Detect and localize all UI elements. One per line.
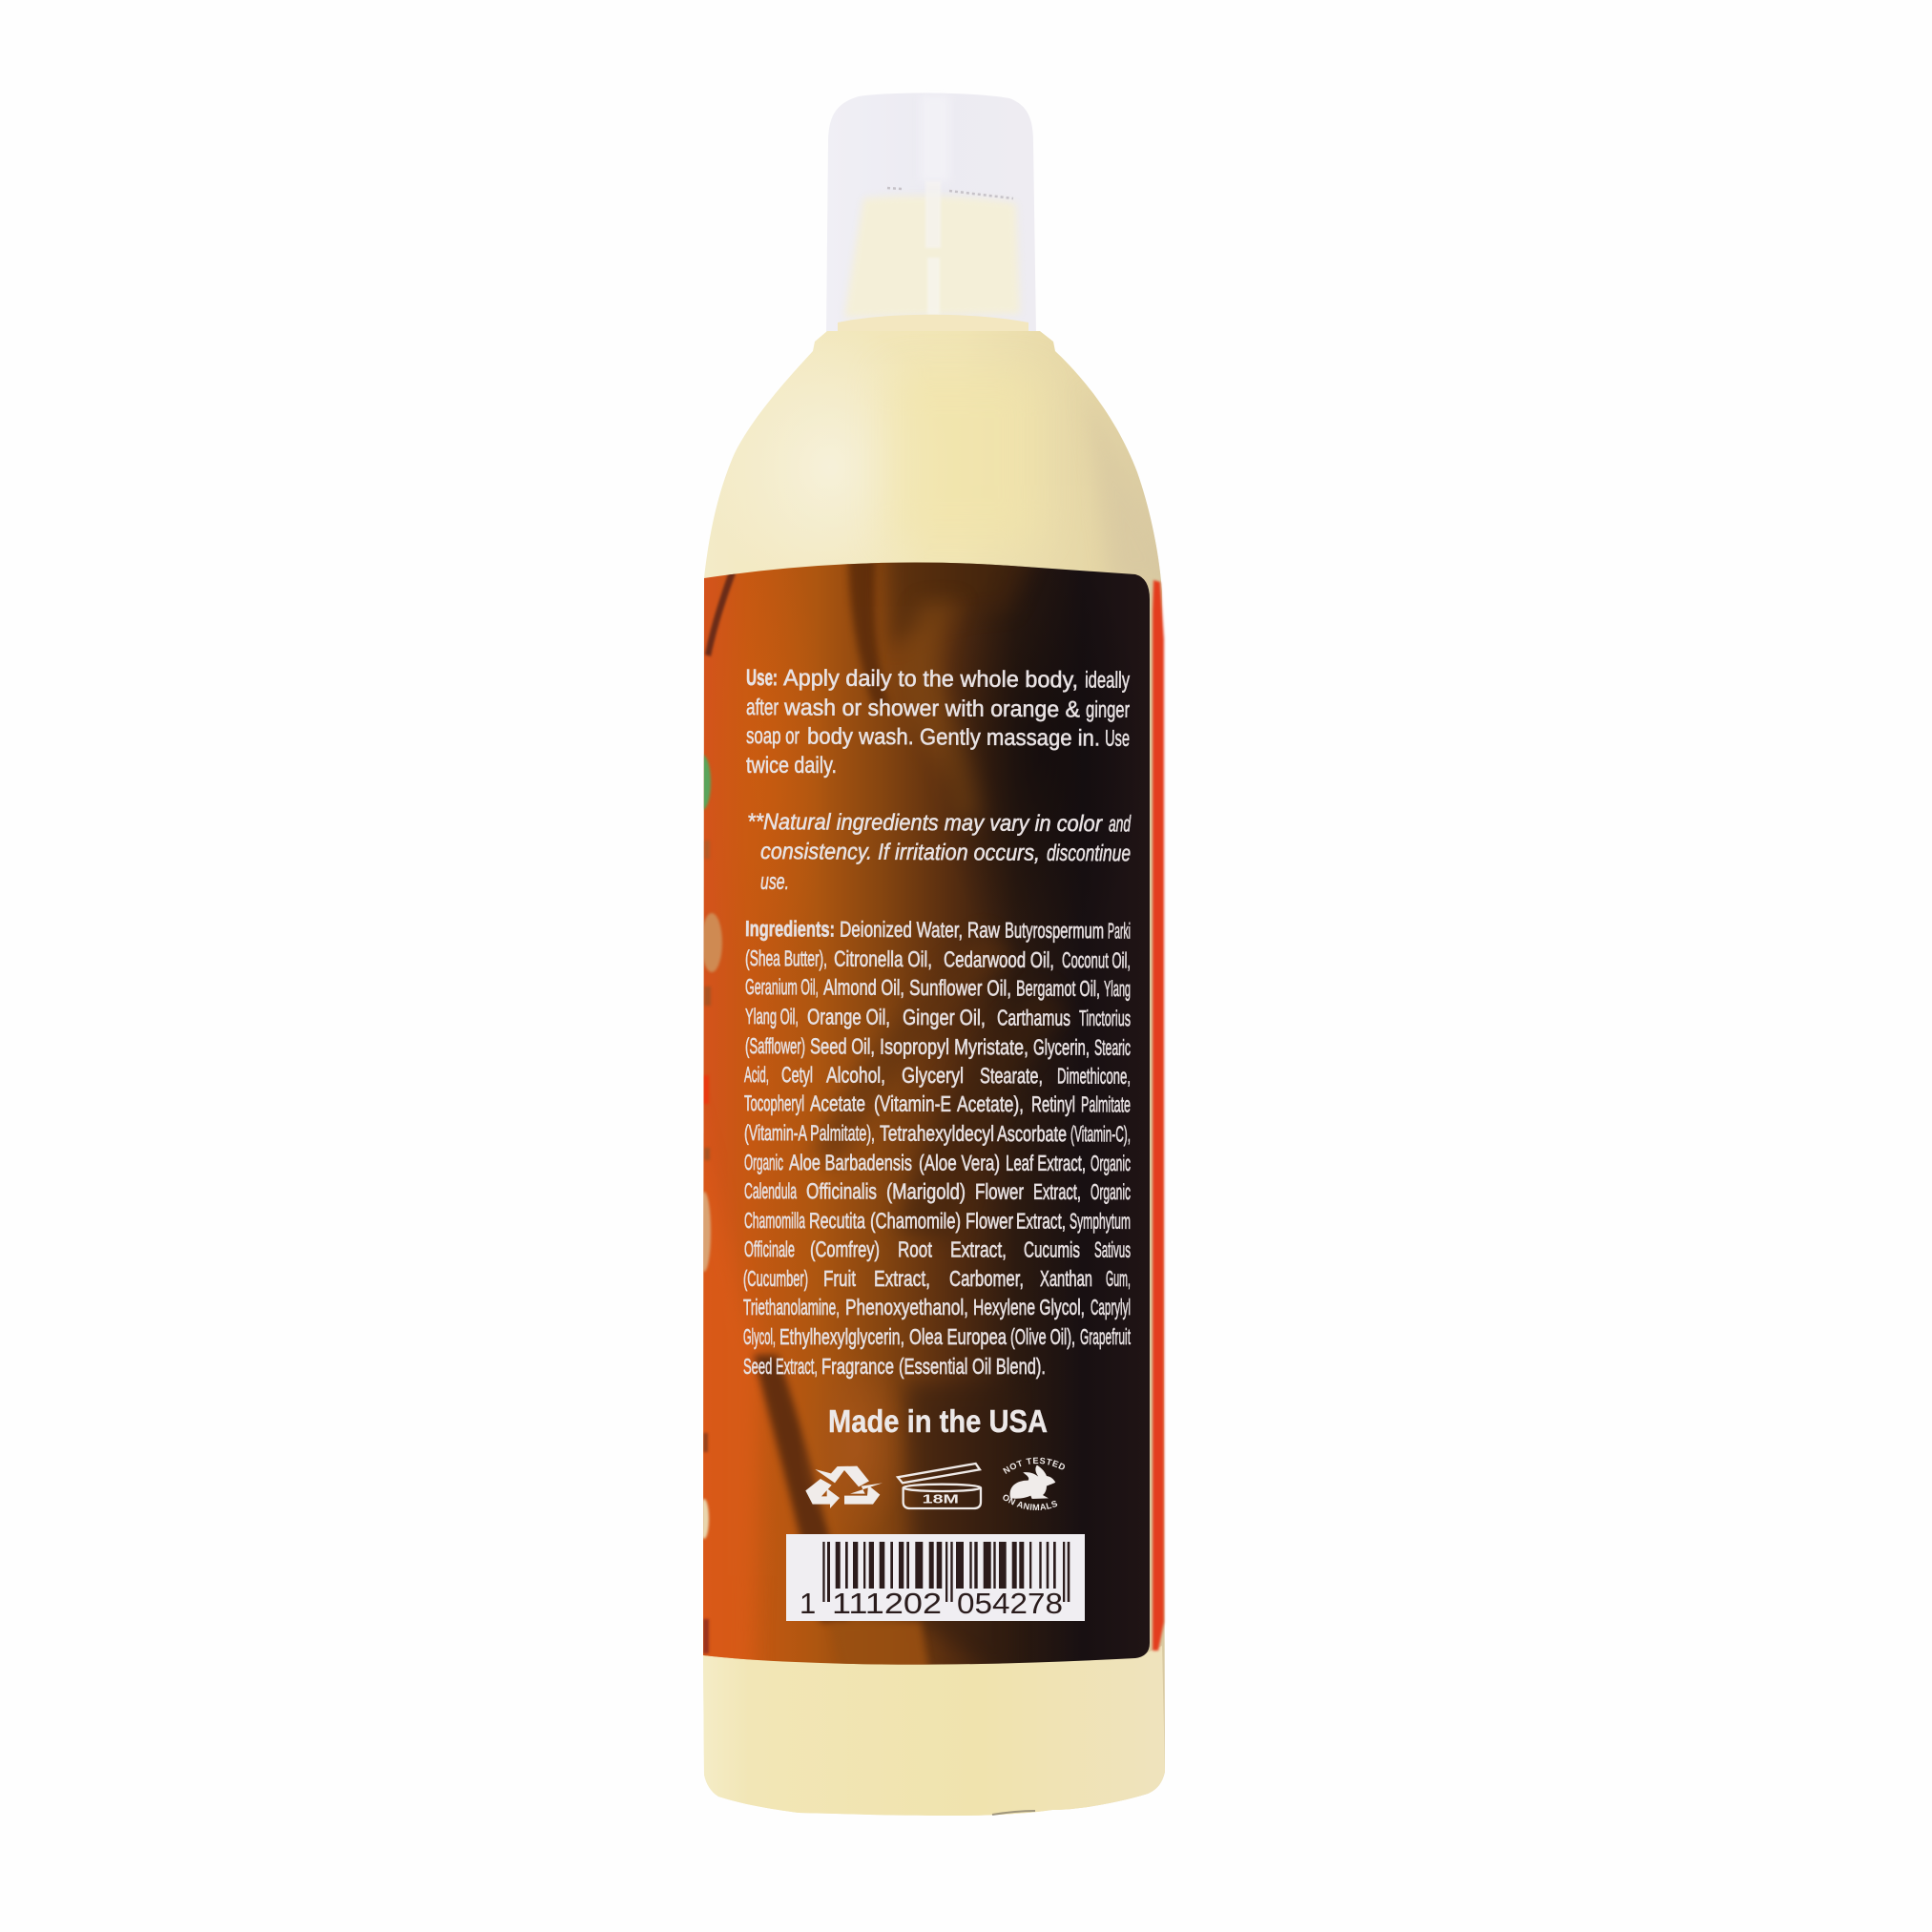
ingredients list: Tocopheryl <box>744 1091 804 1115</box>
ingredients list: Geranium Oil, <box>745 974 819 999</box>
ingredients list: Retinyl <box>1031 1091 1075 1116</box>
ingredients list: Triethanolamine, <box>743 1295 840 1319</box>
back label panel <box>687 534 1164 1679</box>
barcode digits: 1 <box>800 1587 816 1620</box>
ingredients list: Bergamot Oil, <box>1016 975 1100 1001</box>
ingredients list: Dimethicone, <box>1057 1063 1131 1089</box>
ingredients list: Acetate <box>810 1091 865 1115</box>
made in the USA: Made in the USA <box>828 1403 1048 1439</box>
ingredients list: Officinalis <box>806 1178 877 1203</box>
ingredients list: Alcohol, <box>826 1062 885 1088</box>
usage directions: soap or <box>746 723 800 749</box>
base shadow nick <box>992 1811 1035 1815</box>
icon: not tested on animals rabbit <box>1003 1458 1065 1510</box>
ingredients list: Root <box>898 1236 932 1261</box>
ingredients list: Almond Oil, <box>823 974 904 1000</box>
ingredients list: (Essential Oil Blend). <box>899 1354 1046 1379</box>
ingredients list: Seed Extract, <box>743 1354 818 1379</box>
ingredients list: (Vitamin-C), <box>1070 1121 1131 1146</box>
barcode digits <box>800 1587 1063 1620</box>
barcode bars <box>822 1542 1070 1602</box>
red front-label edge <box>1153 580 1164 1651</box>
ingredients list: Recutita <box>809 1208 865 1233</box>
ingredients list: Ascorbate <box>997 1121 1067 1146</box>
ingredients list: Calendula <box>744 1178 797 1203</box>
ingredients list: Acid, <box>744 1062 769 1087</box>
ingredients list: (Shea Butter), <box>745 945 827 971</box>
ingredients list: Stearate, <box>980 1063 1043 1088</box>
ingredients list: Extract, <box>1016 1208 1066 1234</box>
barcode digits: 111202 <box>832 1587 942 1620</box>
ingredients list: Ethylhexylglycerin, <box>779 1324 904 1349</box>
ingredients list: Officinale <box>744 1236 795 1261</box>
usage directions: ideally <box>1085 667 1130 694</box>
ingredients list: Citronella Oil, <box>834 946 932 971</box>
ingredients list: Orange Oil, <box>807 1004 890 1029</box>
usage directions: body wash. Gently massage in. <box>807 723 1100 752</box>
ingredients list: Ginger Oil, <box>903 1005 986 1029</box>
ingredients list: Caprylyl <box>1091 1295 1131 1319</box>
ingredients list: Organic <box>1091 1179 1131 1204</box>
barcode digits: 054278 <box>957 1587 1063 1620</box>
product photo: bottle back view <box>703 93 1166 1816</box>
ingredients list: (Chamomile) <box>870 1208 961 1233</box>
ingredients list: (Aloe Vera) <box>919 1150 1000 1175</box>
icon: period after opening 18M jar <box>898 1464 981 1508</box>
usage directions: twice daily. <box>746 753 837 779</box>
ingredients list: Extract, <box>950 1236 1007 1261</box>
lower bottle section <box>703 1646 1165 1816</box>
natural ingredients note: use. <box>760 869 789 895</box>
ingredients list: Organic <box>744 1150 783 1174</box>
ingredients list: Sunflower Oil, <box>909 975 1011 1000</box>
ingredients list: Stearic <box>1094 1035 1131 1060</box>
icon: not tested on animals rabbit: ON ANIMALS <box>1003 1494 1057 1510</box>
ingredients list: (Vitamin-E <box>874 1091 951 1116</box>
ingredients list: Carthamus <box>997 1005 1070 1030</box>
ingredients list: Sativus <box>1094 1237 1131 1262</box>
18M label: 18M <box>923 1492 959 1506</box>
ingredients list: Deionized Water, Raw <box>840 917 1000 943</box>
ingredients list: Flower <box>975 1179 1024 1204</box>
clear flip cap <box>826 93 1036 334</box>
ingredients list: Cucumis <box>1024 1237 1080 1262</box>
ingredients list: Extract, <box>874 1266 930 1291</box>
natural ingredients note: discontinue <box>1047 841 1131 866</box>
ingredients list: Symphytum <box>1070 1209 1131 1234</box>
ingredients list: Glyceryl <box>902 1063 964 1088</box>
ingredients list: Hexylene Glycol, <box>973 1295 1085 1319</box>
ingredients list: Olea Europea <box>909 1324 1007 1349</box>
ingredients list: Glycol, <box>743 1324 776 1349</box>
cream neck seen through cap <box>844 196 1020 318</box>
ingredients list: Cedarwood Oil, <box>944 946 1054 972</box>
ingredients list: Leaf Extract, <box>1006 1151 1086 1175</box>
ingredients list: (Olive Oil), <box>1010 1324 1075 1349</box>
usage directions: Apply daily to the whole body, <box>783 665 1078 693</box>
product photo: bottle back view: Ylang <box>1104 976 1131 1001</box>
icon: recycling symbol <box>805 1466 883 1508</box>
ingredients list: Chamomilla <box>744 1208 805 1233</box>
ingredients list: Butyrospermum <box>1005 918 1104 943</box>
natural ingredients note: **Natural ingredients may vary in color <box>747 809 1103 837</box>
ingredients list <box>743 916 1131 1379</box>
ingredients list: Xanthan <box>1040 1266 1092 1291</box>
usage directions: ginger <box>1086 696 1130 723</box>
ingredients list: Ingredients: <box>745 916 835 942</box>
natural ingredients note: consistency. If irritation occurs, <box>760 839 1040 866</box>
usage directions: Use <box>1105 726 1130 752</box>
ingredients list: Phenoxyethanol, <box>845 1295 968 1319</box>
usage directions <box>746 665 1130 779</box>
ingredients list: Organic <box>1091 1151 1131 1175</box>
natural ingredients note: and <box>1109 811 1131 837</box>
ingredients list: Aloe Barbadensis <box>789 1150 912 1174</box>
ingredients list: Flower <box>966 1208 1013 1233</box>
ingredients list: Grapefruit <box>1080 1324 1131 1349</box>
ingredients list: Glycerin, <box>1033 1034 1090 1060</box>
label swirl pattern <box>703 563 1061 1665</box>
ingredients list: Tetrahexyldecyl <box>880 1120 994 1146</box>
usage directions: wash or shower with orange & <box>783 695 1080 722</box>
ingredients list: Ylang Oil, <box>745 1004 799 1028</box>
ingredients list: (Safflower) <box>745 1033 805 1058</box>
ingredients list: Tinctorius <box>1079 1006 1131 1030</box>
shoulder highlights <box>750 365 1161 578</box>
ingredients list: Isopropyl Myristate, <box>880 1034 1028 1059</box>
bottle body <box>703 324 1178 1816</box>
ingredients list: (Cucumber) <box>743 1266 808 1291</box>
ingredients list: Cetyl <box>781 1062 813 1087</box>
product photo: bottle back view: Gum, <box>1106 1266 1131 1291</box>
natural ingredients note <box>747 809 1131 895</box>
ingredients list: Carbomer, <box>949 1266 1024 1291</box>
ingredients list: (Comfrey) <box>810 1236 880 1261</box>
ingredients list: Palmitate <box>1081 1091 1131 1116</box>
wrapped front-label art at left edge <box>703 754 723 1654</box>
usage directions: Use: <box>746 665 778 691</box>
ingredients list: Extract, <box>1033 1179 1081 1204</box>
ingredients list: Fruit <box>823 1266 856 1291</box>
ingredients list: Coconut Oil, <box>1062 947 1131 972</box>
ingredients list: Fragrance <box>821 1354 894 1379</box>
ingredients list: (Vitamin-A Palmitate), <box>744 1120 875 1145</box>
ingredients list: Acetate), <box>957 1091 1024 1116</box>
product photo: bottle back view: Parki <box>1108 918 1131 943</box>
icon: not tested on animals rabbit: NOT TESTED <box>1003 1458 1065 1474</box>
ingredients list: (Marigold) <box>886 1178 966 1204</box>
barcode <box>786 1534 1085 1621</box>
ingredients list: Seed Oil, <box>810 1033 875 1059</box>
usage directions: after <box>746 695 779 720</box>
